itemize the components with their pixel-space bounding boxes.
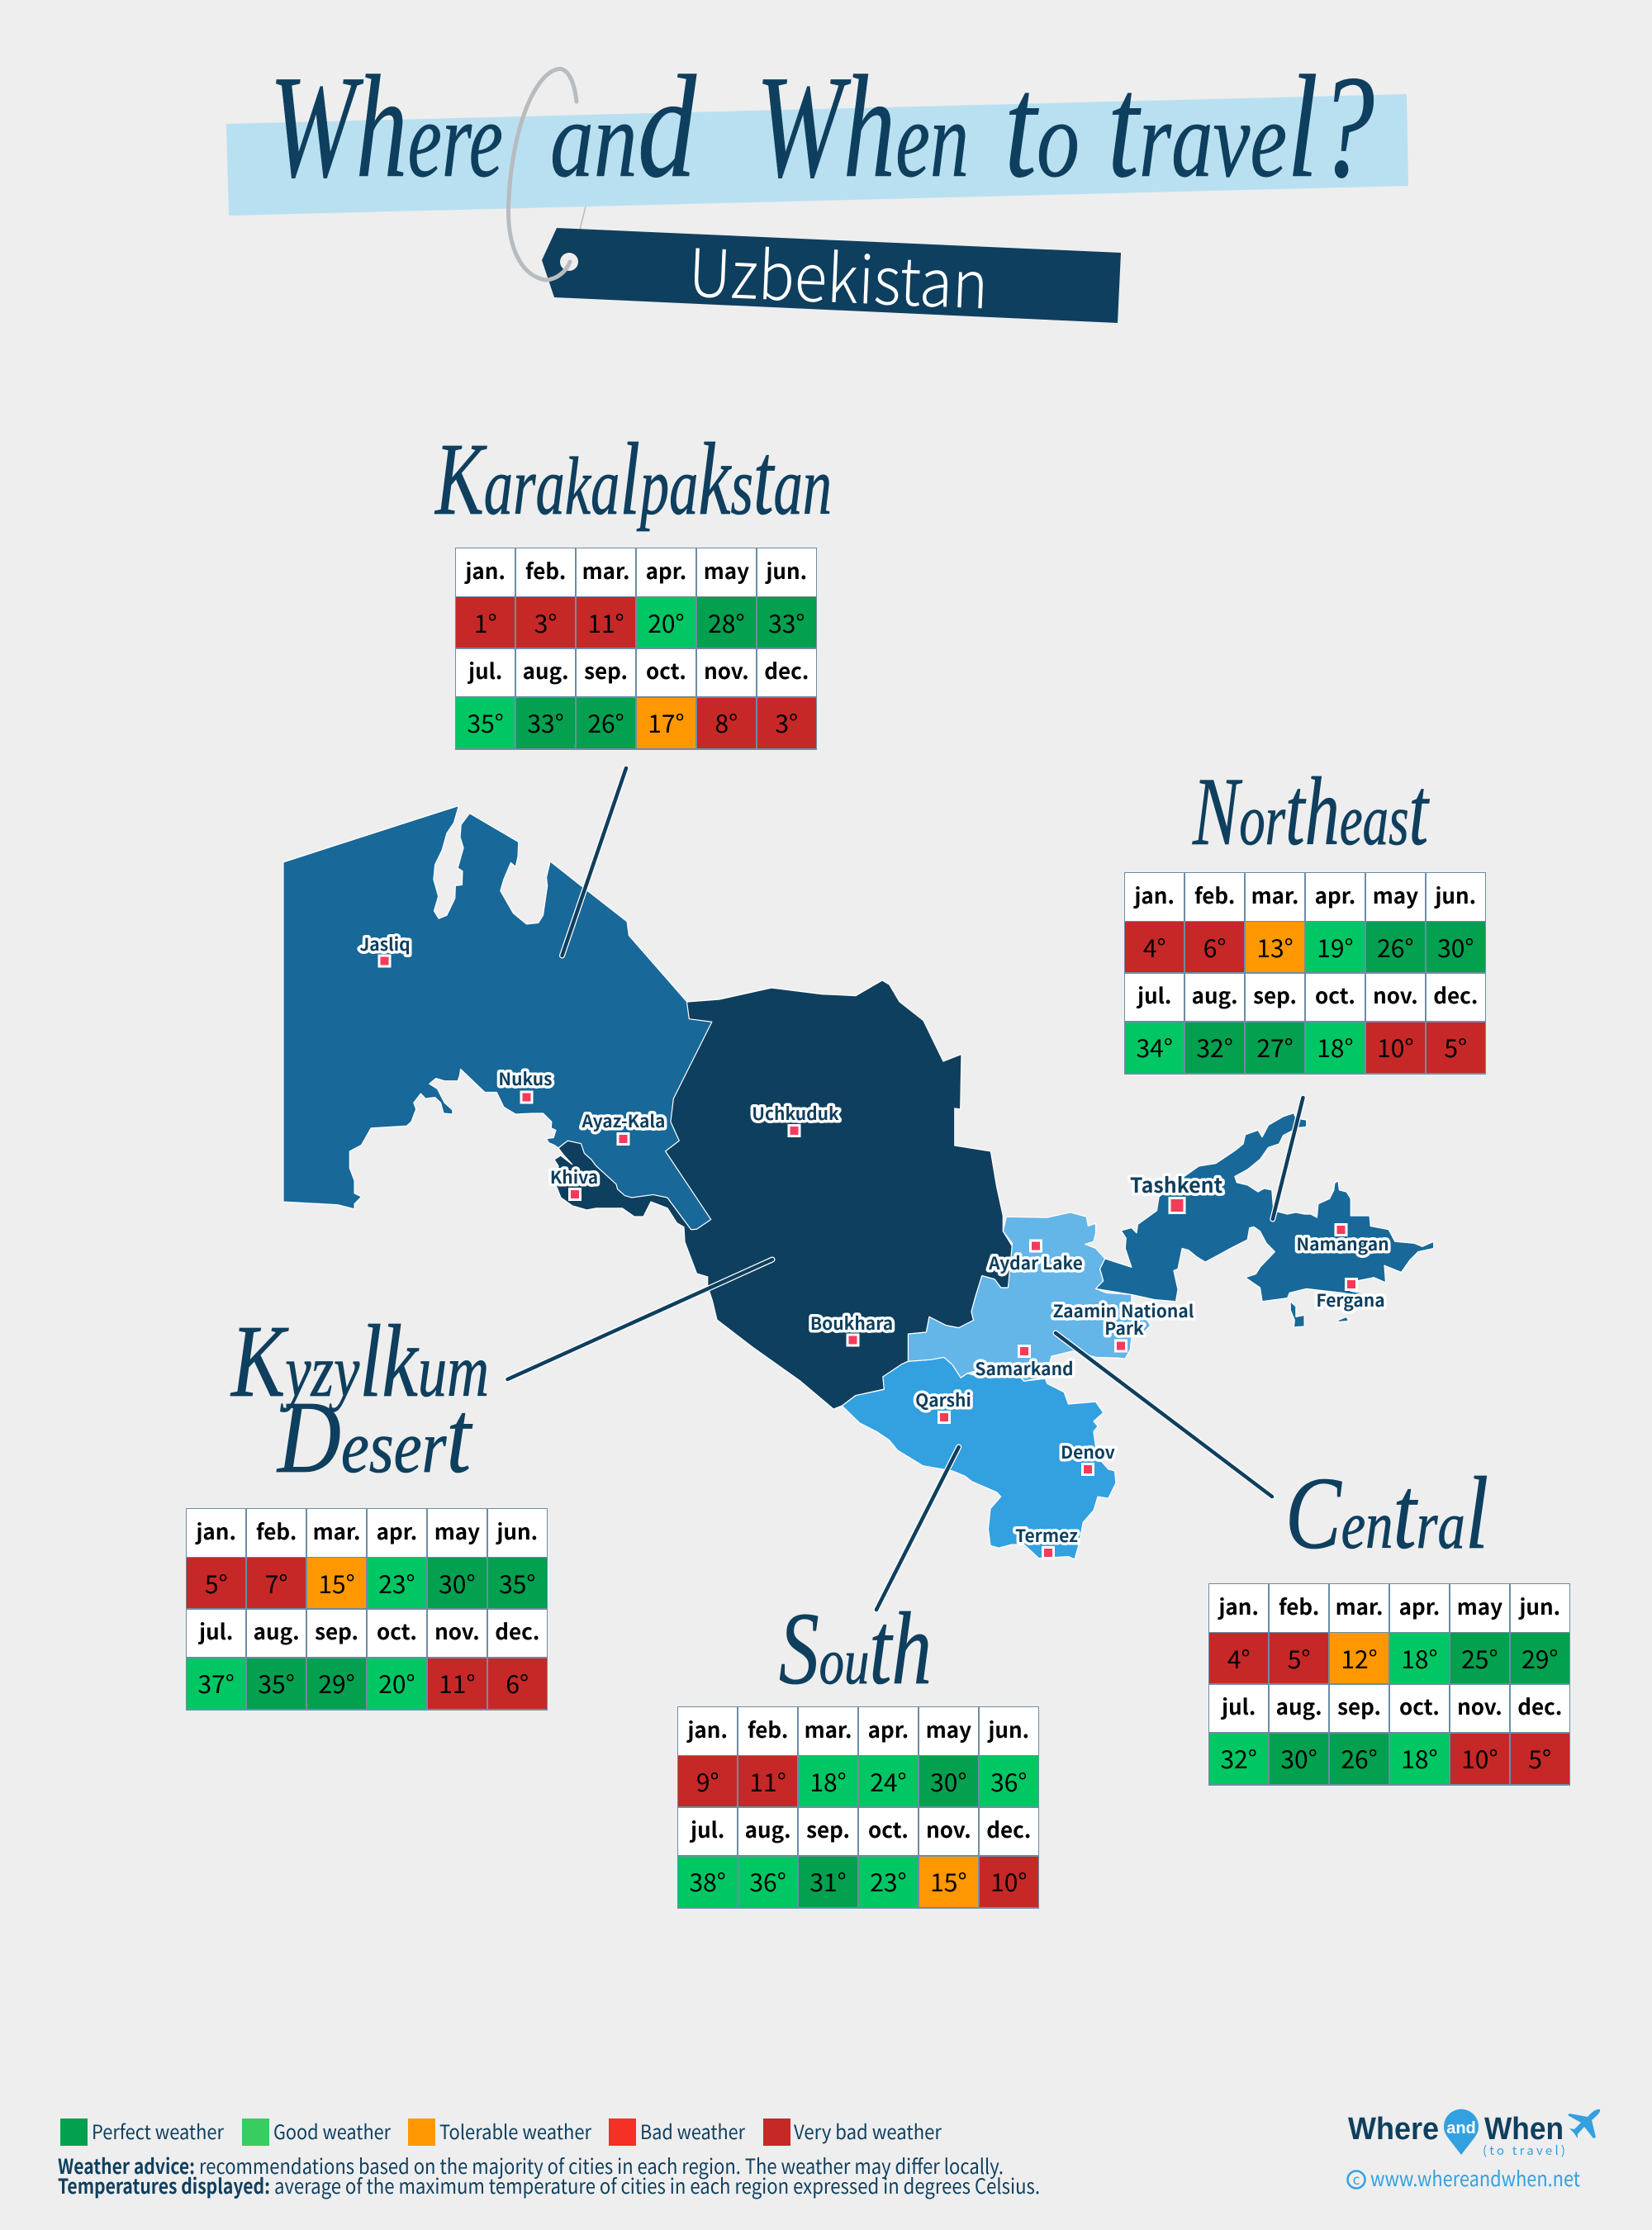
table: Northeast: 34°: [1137, 1028, 1173, 1065]
table: Northeast: sep.: [1253, 980, 1297, 1010]
table: Karakalpakstan: 3°: [534, 603, 557, 639]
logo: Where: [1348, 2112, 1439, 2147]
table: Karakalpakstan: 1°: [474, 603, 497, 639]
country tag: [542, 220, 1121, 329]
city labels: Boukhara: [810, 1311, 893, 1336]
table: Kyzylkum Desert: nov.: [434, 1616, 480, 1646]
city labels: Khiva: [550, 1165, 598, 1189]
table: Northeast: 5°: [1444, 1028, 1467, 1065]
table: Karakalpakstan: jun.: [766, 555, 807, 586]
table: Central: oct.: [1399, 1691, 1440, 1721]
table: Central: may: [1457, 1591, 1502, 1621]
table: Karakalpakstan: feb.: [525, 555, 566, 586]
table: Kyzylkum Desert: 20°: [378, 1664, 415, 1701]
region: South: [842, 1357, 1116, 1559]
region: Karakalpakstan: [283, 806, 712, 1230]
table: South: [677, 1706, 1039, 1909]
table: Northeast: may: [1373, 880, 1418, 910]
legend: Perfect weather: [92, 2116, 225, 2145]
table: Central: 5°: [1288, 1639, 1310, 1675]
table: Kyzylkum Desert: 5°: [205, 1564, 228, 1601]
table: Central: 26°: [1341, 1739, 1378, 1776]
table: Northeast: oct.: [1315, 980, 1355, 1010]
table: Kyzylkum Desert: 11°: [439, 1664, 476, 1701]
title: travel?: [1108, 45, 1374, 208]
table: Karakalpakstan: 26°: [587, 704, 624, 740]
table: Kyzylkum Desert: 23°: [378, 1564, 415, 1601]
table: Central: jul.: [1222, 1691, 1256, 1721]
table: Karakalpakstan: aug.: [523, 655, 569, 686]
table: Kyzylkum Desert: may: [434, 1516, 480, 1546]
logo: (to travel): [1483, 2142, 1565, 2159]
table: Karakalpakstan: 17°: [648, 704, 685, 740]
table: Northeast: [1124, 872, 1486, 1075]
table: Northeast: 10°: [1377, 1028, 1414, 1065]
table: Karakalpakstan: 8°: [714, 704, 738, 740]
table: Karakalpakstan: 33°: [527, 704, 564, 740]
title: [269, 45, 1374, 208]
table: South: feb.: [748, 1714, 788, 1744]
region: Central: [908, 1212, 1151, 1381]
table: South: 18°: [809, 1763, 847, 1799]
table: Northeast: 4°: [1143, 928, 1166, 965]
table: Central: dec.: [1517, 1691, 1562, 1721]
table: Central: aug.: [1276, 1691, 1322, 1721]
temperatures note: Temperatures displayed:: [58, 2171, 270, 2200]
table: Northeast: nov.: [1373, 980, 1418, 1010]
table: Northeast: 19°: [1317, 928, 1354, 965]
table: Northeast: jan.: [1134, 880, 1175, 910]
table: Karakalpakstan: sep.: [584, 655, 628, 686]
table: South: 9°: [696, 1763, 719, 1799]
table: Central: 30°: [1280, 1739, 1317, 1776]
city labels: Aydar Lake: [988, 1250, 1083, 1275]
legend: [60, 2116, 942, 2146]
table: Kyzylkum Desert: feb.: [256, 1516, 297, 1546]
city labels: Tashkent: [1130, 1170, 1223, 1199]
tag string: [508, 69, 577, 280]
logo: and: [1446, 2119, 1476, 2137]
table: Karakalpakstan: 11°: [587, 603, 624, 639]
table: South: 38°: [689, 1862, 726, 1899]
table: Central: feb.: [1279, 1591, 1319, 1621]
city labels: Qarshi: [915, 1388, 971, 1412]
region title: Central: Central: [1285, 1457, 1488, 1571]
table: Kyzylkum Desert: jul.: [199, 1616, 233, 1646]
region title: Kyzylkum Desert: [230, 1305, 489, 1495]
legend: Bad weather: [640, 2116, 746, 2145]
city labels: Samarkand: [975, 1356, 1074, 1381]
city labels: Uchkuduk: [752, 1101, 839, 1126]
table: Karakalpakstan: jan.: [465, 555, 506, 586]
table: Kyzylkum Desert: apr.: [377, 1516, 417, 1546]
table: Central: 18°: [1401, 1639, 1438, 1675]
table: South: apr.: [868, 1714, 909, 1744]
leader lines: [507, 768, 1303, 1610]
table: Central: jun.: [1519, 1591, 1560, 1621]
city labels: Namangan: [1296, 1231, 1389, 1256]
table: Kyzylkum Desert: [186, 1508, 548, 1710]
logo: When: [1484, 2112, 1564, 2147]
temperatures note: average of the maximum temperature of cities in each region expressed in degrees Celsius.: [274, 2171, 1040, 2200]
table: Northeast: apr.: [1315, 880, 1355, 910]
tag thin string: [580, 206, 586, 230]
weather advice note: recommendations based on the majority of cities in each region. The weather may differ locally.: [199, 2151, 1004, 2180]
region title: South: South: [779, 1592, 932, 1706]
weather advice note: Weather advice:: [58, 2151, 195, 2180]
table: Northeast: feb.: [1194, 880, 1235, 910]
table: Karakalpakstan: dec.: [764, 655, 809, 686]
city labels: Park: [1104, 1316, 1144, 1340]
table: South: jan.: [687, 1714, 728, 1744]
table: Karakalpakstan: apr.: [646, 555, 686, 586]
table: Northeast: 30°: [1437, 928, 1474, 965]
title: When: [756, 45, 969, 208]
table: South: 10°: [990, 1862, 1027, 1899]
table: Northeast: 32°: [1196, 1028, 1233, 1065]
table: Karakalpakstan: nov.: [704, 655, 749, 686]
table: Kyzylkum Desert: jun.: [496, 1516, 538, 1546]
table: Central: apr.: [1399, 1591, 1440, 1621]
table: Central: nov.: [1457, 1691, 1502, 1721]
city labels: Jasliq: [359, 932, 411, 956]
table: Kyzylkum Desert: 29°: [318, 1664, 355, 1701]
table: Kyzylkum Desert: 35°: [258, 1664, 295, 1701]
website: www.whereandwhen.net: [1370, 2163, 1580, 2193]
city labels: Fergana: [1316, 1288, 1385, 1312]
city labels: [359, 932, 1389, 1548]
title band: [226, 94, 1408, 216]
table: South: oct.: [868, 1814, 909, 1844]
table: Karakalpakstan: [455, 548, 817, 750]
region title: Kyzylkum Desert: Desert: [276, 1381, 473, 1495]
title: Where: [269, 45, 503, 208]
city labels: Denov: [1061, 1440, 1115, 1464]
table: Northeast: 26°: [1377, 928, 1414, 965]
table: Northeast: dec.: [1433, 980, 1478, 1010]
table: Central: [1208, 1583, 1570, 1786]
icon: plane: [1568, 2109, 1600, 2138]
table: Northeast: mar.: [1251, 880, 1298, 910]
title: to: [1004, 45, 1080, 208]
table: Kyzylkum Desert: oct.: [377, 1616, 417, 1646]
table: Karakalpakstan: jul.: [468, 655, 502, 686]
table: South: 24°: [870, 1763, 907, 1799]
table: Northeast: jun.: [1435, 880, 1476, 910]
table: Central: 32°: [1221, 1739, 1257, 1776]
table: South: 11°: [749, 1763, 786, 1799]
table: Northeast: 27°: [1256, 1028, 1294, 1065]
city labels: Termez: [1015, 1523, 1078, 1548]
legend: Very bad weather: [794, 2116, 942, 2145]
region title: Northeast: Northeast: [1192, 757, 1430, 866]
table: Central: 4°: [1227, 1639, 1251, 1675]
table: Kyzylkum Desert: aug.: [254, 1616, 300, 1646]
table: South: aug.: [745, 1814, 791, 1844]
table: Kyzylkum Desert: 30°: [439, 1564, 476, 1601]
region: Northeast: [1096, 1113, 1434, 1327]
table: Northeast: aug.: [1192, 980, 1238, 1010]
city labels: Zaamin National: [1053, 1298, 1194, 1323]
icon: map pin: [1444, 2109, 1479, 2155]
table: South: sep.: [806, 1814, 850, 1844]
table: Kyzylkum Desert: dec.: [495, 1616, 539, 1646]
legend: Good weather: [273, 2116, 392, 2145]
table: Karakalpakstan: 33°: [768, 603, 805, 639]
table: Karakalpakstan: 3°: [775, 704, 798, 740]
title: and: [550, 45, 697, 208]
table: Northeast: 13°: [1256, 928, 1294, 965]
table: Central: mar.: [1336, 1591, 1383, 1621]
table: Central: jan.: [1218, 1591, 1259, 1621]
legend: Tolerable weather: [439, 2116, 592, 2145]
table: Central: 10°: [1461, 1739, 1498, 1776]
table: South: 30°: [930, 1763, 967, 1799]
table: South: may: [926, 1714, 971, 1744]
table: Kyzylkum Desert: mar.: [313, 1516, 360, 1546]
table: Karakalpakstan: 20°: [648, 603, 685, 639]
table: Karakalpakstan: 28°: [708, 603, 745, 639]
table: Northeast: 6°: [1203, 928, 1226, 965]
country tag: Uzbekistan: [686, 220, 990, 329]
table: South: 23°: [870, 1862, 907, 1899]
table: South: jun.: [988, 1714, 1029, 1744]
map: [283, 768, 1434, 1610]
table: South: nov.: [926, 1814, 971, 1844]
table: Central: 12°: [1341, 1639, 1378, 1675]
table: South: mar.: [805, 1714, 852, 1744]
region: Kyzylkum Desert: [554, 980, 1014, 1409]
table: Northeast: 18°: [1317, 1028, 1354, 1065]
table: South: 15°: [930, 1862, 967, 1899]
table: Central: sep.: [1337, 1691, 1381, 1721]
table: Kyzylkum Desert: 35°: [499, 1564, 535, 1601]
table: Kyzylkum Desert: 37°: [198, 1664, 235, 1701]
city markers: [379, 956, 1356, 1558]
table: Central: 5°: [1528, 1739, 1551, 1776]
table: Karakalpakstan: mar.: [582, 555, 629, 586]
table: South: 36°: [749, 1862, 786, 1899]
region title: Kyzylkum Desert: Kyzylkum: [230, 1305, 489, 1419]
website: c: [1353, 2168, 1360, 2189]
logo: [1348, 2109, 1600, 2159]
table: Kyzylkum Desert: 7°: [265, 1564, 287, 1601]
table: Kyzylkum Desert: 15°: [318, 1564, 355, 1601]
city labels: Ayaz-Kala: [582, 1108, 665, 1133]
table: Northeast: jul.: [1137, 980, 1171, 1010]
table: South: jul.: [691, 1814, 724, 1844]
table: South: 36°: [990, 1763, 1027, 1799]
table: Kyzylkum Desert: sep.: [315, 1616, 358, 1646]
table: South: dec.: [986, 1814, 1031, 1844]
city labels: Nukus: [498, 1066, 553, 1091]
table: Karakalpakstan: 35°: [468, 704, 504, 740]
table: Karakalpakstan: oct.: [646, 655, 686, 686]
table: Central: 29°: [1521, 1639, 1558, 1675]
table: Karakalpakstan: may: [704, 555, 749, 586]
table: South: 31°: [809, 1862, 847, 1899]
table: Central: 25°: [1461, 1639, 1498, 1675]
region title: Karakalpakstan: Karakalpakstan: [434, 423, 832, 537]
table: Kyzylkum Desert: jan.: [196, 1516, 236, 1546]
table: Central: 18°: [1401, 1739, 1438, 1776]
table: Kyzylkum Desert: 6°: [506, 1664, 529, 1701]
